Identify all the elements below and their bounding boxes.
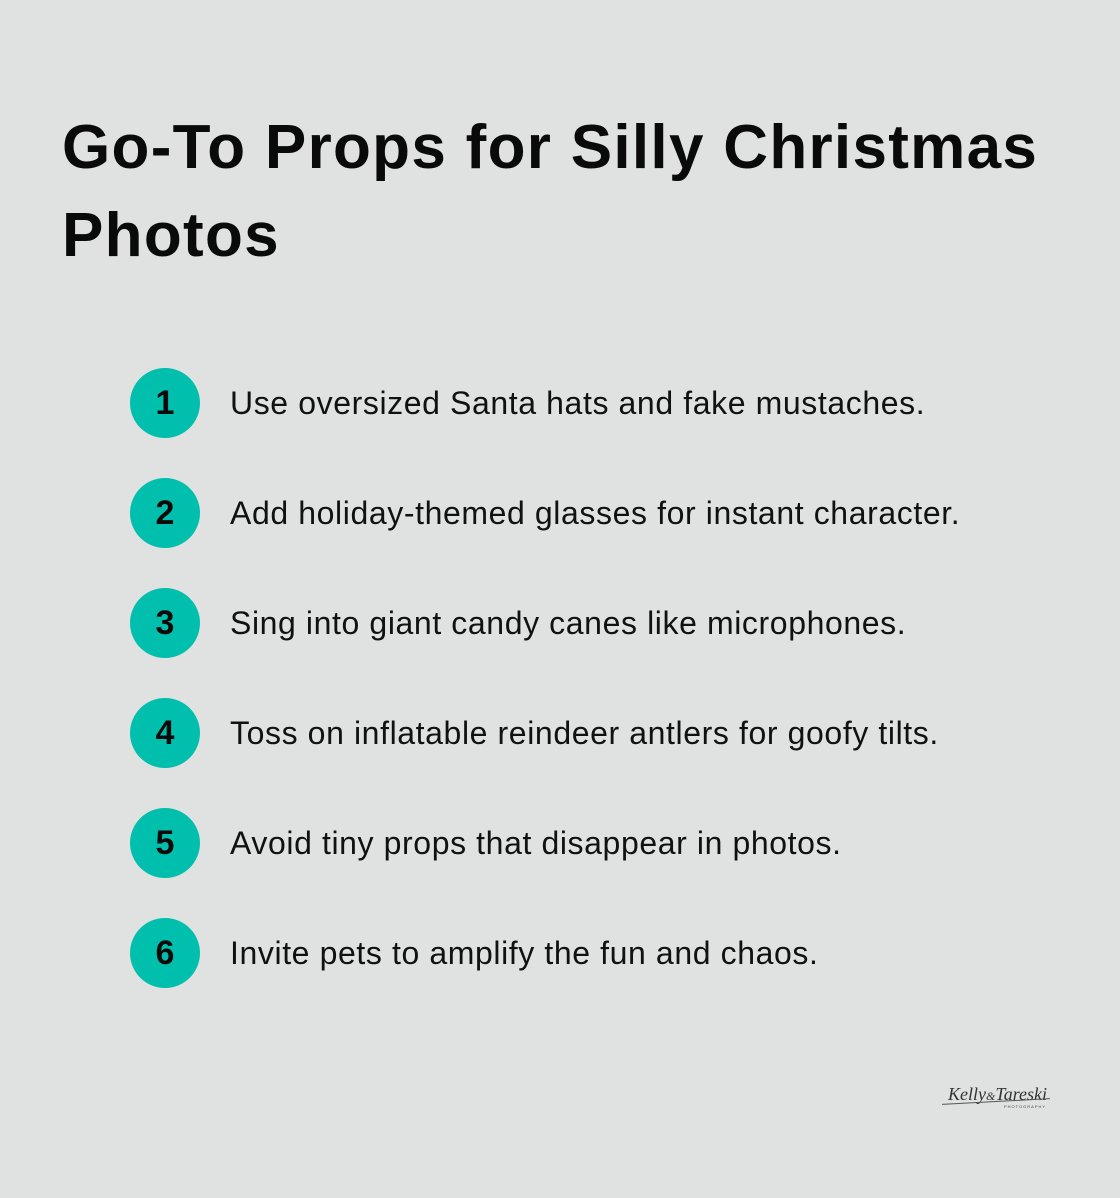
item 2 <box>130 478 960 548</box>
item 6: 6 <box>156 934 174 972</box>
logo signature: Kelly&Tareski <box>948 1084 1047 1104</box>
title: Photos <box>62 201 280 270</box>
logo signature: PHOTOGRAPHY <box>1004 1104 1046 1109</box>
title: Go-To Props for Silly Christmas <box>62 113 1038 182</box>
item 2: Add holiday-themed glasses for instant character. <box>230 495 960 531</box>
item 5: Avoid tiny props that disappear in photos. <box>230 825 842 861</box>
item 5 <box>130 808 842 878</box>
item 1 <box>130 368 925 438</box>
item 5: 5 <box>156 824 174 862</box>
item 3 <box>130 588 906 658</box>
item 6: Invite pets to amplify the fun and chaos. <box>230 935 818 971</box>
item 2: 2 <box>156 494 174 532</box>
item 1: Use oversized Santa hats and fake mustaches. <box>230 385 925 421</box>
item 4: Toss on inflatable reindeer antlers for goofy tilts. <box>230 715 939 751</box>
item 6 <box>130 918 818 988</box>
item 1: 1 <box>156 384 174 422</box>
item 4: 4 <box>156 714 174 752</box>
item 4 <box>130 698 939 768</box>
title <box>62 113 1038 270</box>
item 3: 3 <box>156 604 174 642</box>
item 3: Sing into giant candy canes like microphones. <box>230 605 906 641</box>
